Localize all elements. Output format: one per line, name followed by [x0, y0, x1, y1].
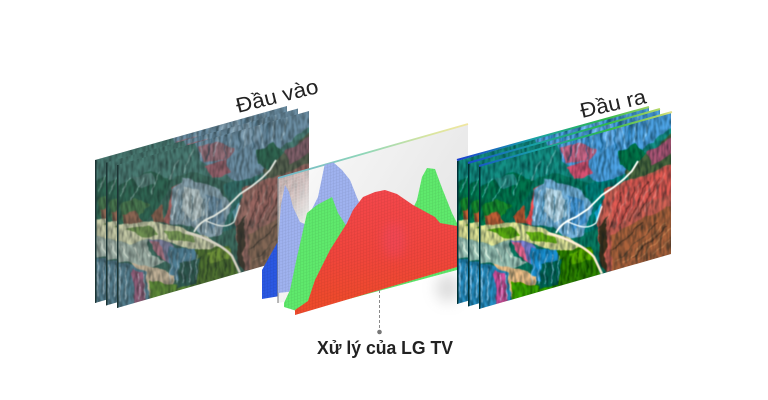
colored top edges of output frames	[457, 107, 672, 166]
connector: dashed leader line with dot	[377, 290, 382, 334]
panel: output image stack	[425, 91, 682, 321]
front input frame	[85, 95, 320, 320]
front output frame	[447, 96, 682, 321]
panel: input image stack	[63, 90, 320, 320]
panel: LG TV processing histogram	[262, 124, 468, 315]
caption: LG TV processing: Xử lý của LG TV	[317, 338, 453, 358]
pale blue histogram inside glass	[278, 162, 359, 293]
red histogram	[295, 190, 457, 315]
heading: output label: Đầu ra	[578, 85, 649, 123]
middle input frame	[74, 92, 309, 318]
heading: input label: Đầu vào	[234, 75, 321, 118]
green histogram	[284, 168, 457, 312]
back input frame	[63, 90, 298, 315]
glass panel	[278, 124, 468, 303]
infographic canvas	[95, 82, 672, 358]
middle output frame	[436, 94, 671, 318]
blue histogram outside glass	[262, 238, 280, 299]
panel: output image stack shadow	[436, 274, 460, 302]
back output frame	[425, 91, 660, 316]
